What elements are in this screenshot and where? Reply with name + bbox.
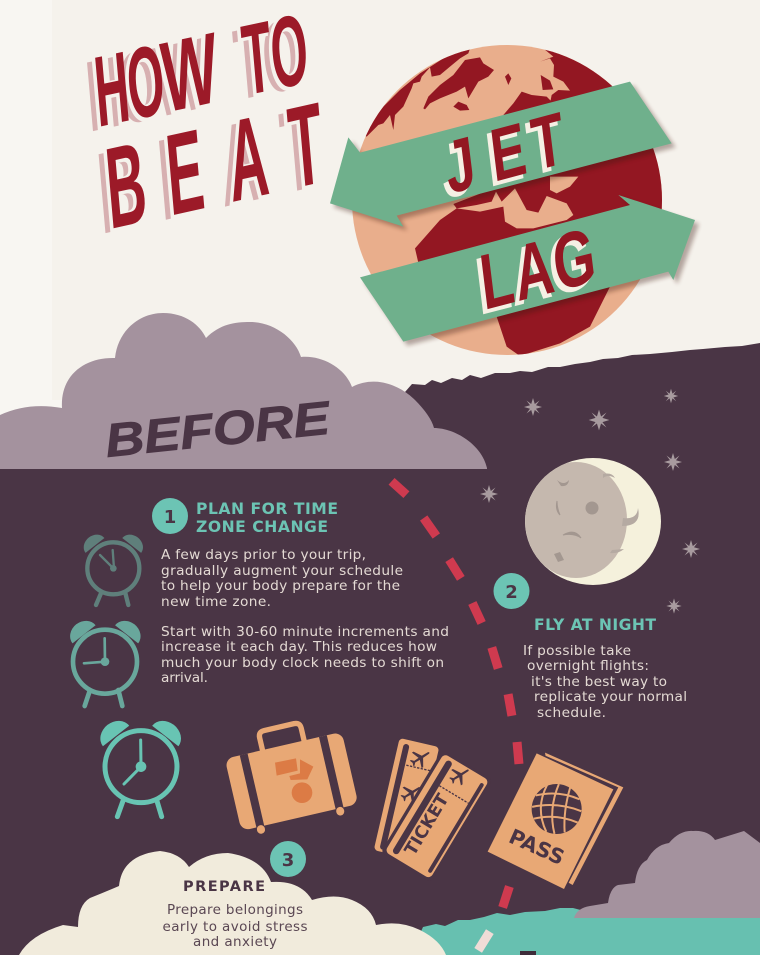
step 3 badge: 3: [282, 850, 294, 871]
step 1 text: A few days prior to your trip,: [161, 547, 366, 563]
step 2 text: replicate your normal: [534, 689, 687, 705]
step 1 heading: ZONE CHANGE: [196, 518, 328, 536]
icon: tickets: [374, 738, 493, 883]
icons: luggage, tickets, passport: [221, 714, 623, 889]
europe gap: [550, 177, 578, 193]
beat: BEAT: [99, 80, 326, 256]
clock: dim: [79, 530, 147, 605]
ticket label: TICKET: [401, 790, 453, 859]
mediterranean: [457, 188, 573, 228]
icon: suitcase: [221, 714, 360, 838]
globe: [352, 45, 667, 356]
cloud: before: [0, 313, 487, 469]
how to: W: [157, 12, 222, 134]
step 1 text: arrival.: [161, 670, 208, 686]
continent: scandinavia: [503, 92, 550, 115]
how to: [82, 0, 313, 154]
continent: south africa: [497, 287, 610, 356]
step 3 badge: [270, 841, 306, 877]
step 1 text: new time zone.: [161, 594, 271, 610]
step 2 text: it's the best way to: [531, 674, 667, 690]
step 2 badge: 2: [505, 582, 518, 603]
step 1 heading: [196, 500, 338, 536]
continent: russia: [540, 50, 612, 102]
step 2 text: overnight flights:: [527, 658, 649, 674]
continent: greenland: [423, 57, 494, 109]
beat: BEAT: [93, 83, 320, 259]
step 3 text: Prepare belongings: [167, 902, 303, 918]
step 1 badge: 1: [164, 507, 176, 528]
step 3 text: early to avoid stress: [162, 919, 308, 935]
step 3 text: [162, 902, 308, 950]
step 2 heading: FLY AT NIGHT: [534, 616, 656, 634]
how to: TO: [230, 0, 304, 122]
stars: [480, 389, 700, 614]
ribbon: lower arrow: [360, 195, 699, 346]
island: iceland: [453, 102, 469, 111]
lag: LAG: [476, 212, 600, 327]
step 2 text: [523, 643, 687, 721]
how to: W: [154, 13, 219, 136]
beat: BEAT: [101, 78, 328, 254]
how to: W: [148, 16, 214, 139]
cloud: prepare: [19, 851, 446, 955]
jet: JET: [441, 96, 569, 210]
cloud: bottom right: [574, 831, 760, 918]
island: svalbard: [505, 73, 511, 85]
moon: [525, 458, 661, 585]
ribbon: upper arrow: [330, 82, 676, 231]
how to: HO: [90, 22, 169, 149]
step 1 text: increase it each day. This reduces how: [161, 639, 437, 655]
clock: mid: [65, 615, 146, 706]
jet: JET: [437, 101, 565, 214]
step 1 text: much your body clock needs to shift on: [161, 655, 444, 671]
passport label: PASS: [505, 824, 568, 870]
continent: eurasia and africa: [415, 148, 662, 262]
step 2 badge: [494, 573, 530, 609]
step 1 heading: PLAN FOR TIME: [196, 500, 338, 518]
clocks: [65, 530, 187, 817]
step 1 text: [161, 547, 449, 686]
route dashes: [389, 478, 536, 955]
dark night background: [0, 343, 760, 955]
step 1 badge: [152, 498, 188, 534]
step 2 text: schedule.: [537, 705, 606, 721]
title: how to beat: [82, 0, 328, 259]
how to: HO: [82, 27, 161, 153]
teal ground: [415, 908, 760, 955]
how to: HO: [88, 24, 166, 150]
step 3 heading: PREPARE: [183, 879, 265, 895]
step 1 text: Start with 30-60 minute increments and: [161, 624, 449, 640]
clock: bright: [94, 715, 187, 817]
lag: LAG: [472, 216, 596, 331]
heading: before: BEFORE: [103, 391, 334, 467]
step 1 text: to help your body prepare for the: [161, 578, 400, 594]
step 3 text: and anxiety: [193, 934, 277, 950]
step 2 text: If possible take: [523, 643, 631, 659]
icon: passport: [488, 753, 623, 889]
step 1 text: gradually augment your schedule: [161, 563, 403, 579]
continent: north america: [363, 47, 471, 137]
